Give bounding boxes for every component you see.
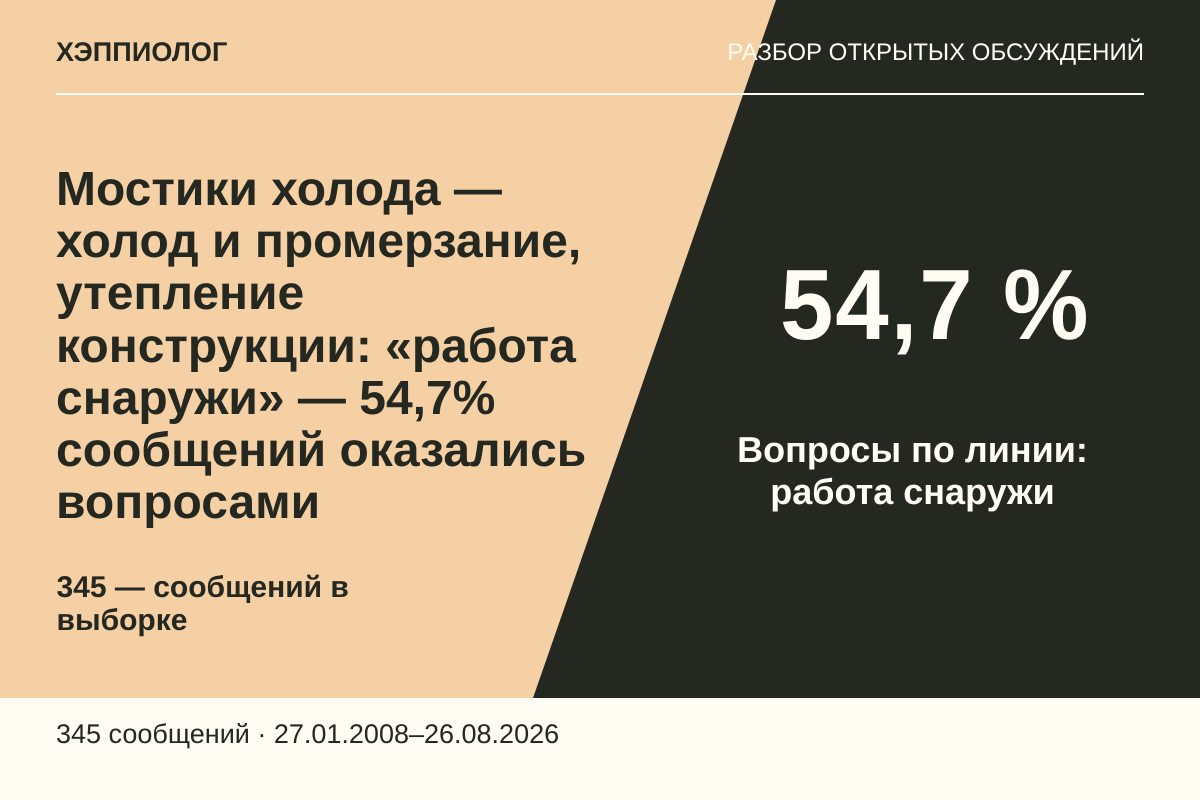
big number caption — [737, 429, 1088, 512]
main heading: утепление — [56, 267, 304, 320]
main heading: холод и промерзание, — [56, 215, 581, 268]
big number: 54,7 % — [780, 248, 1090, 360]
main heading — [56, 163, 586, 529]
main heading: сообщений оказались — [56, 424, 586, 477]
footer text: 345 сообщений · 27.01.2008–26.08.2026 — [56, 719, 559, 749]
header caption: РАЗБОР ОТКРЫТЫХ ОБСУЖДЕНИЙ — [727, 39, 1144, 66]
main heading: конструкции: «работа — [56, 320, 576, 373]
big number caption: Вопросы по линии: — [737, 429, 1088, 470]
sample size note — [56, 570, 349, 637]
main heading: вопросами — [56, 476, 320, 529]
sample size note: выборке — [56, 604, 187, 637]
main heading: снаружи» — 54,7% — [56, 372, 495, 425]
brand label: ХЭППИОЛОГ — [56, 37, 227, 67]
big number caption: работа снаружи — [770, 471, 1055, 512]
main heading: Мостики холода — — [56, 163, 502, 216]
sample size note: 345 — сообщений в — [56, 570, 349, 604]
